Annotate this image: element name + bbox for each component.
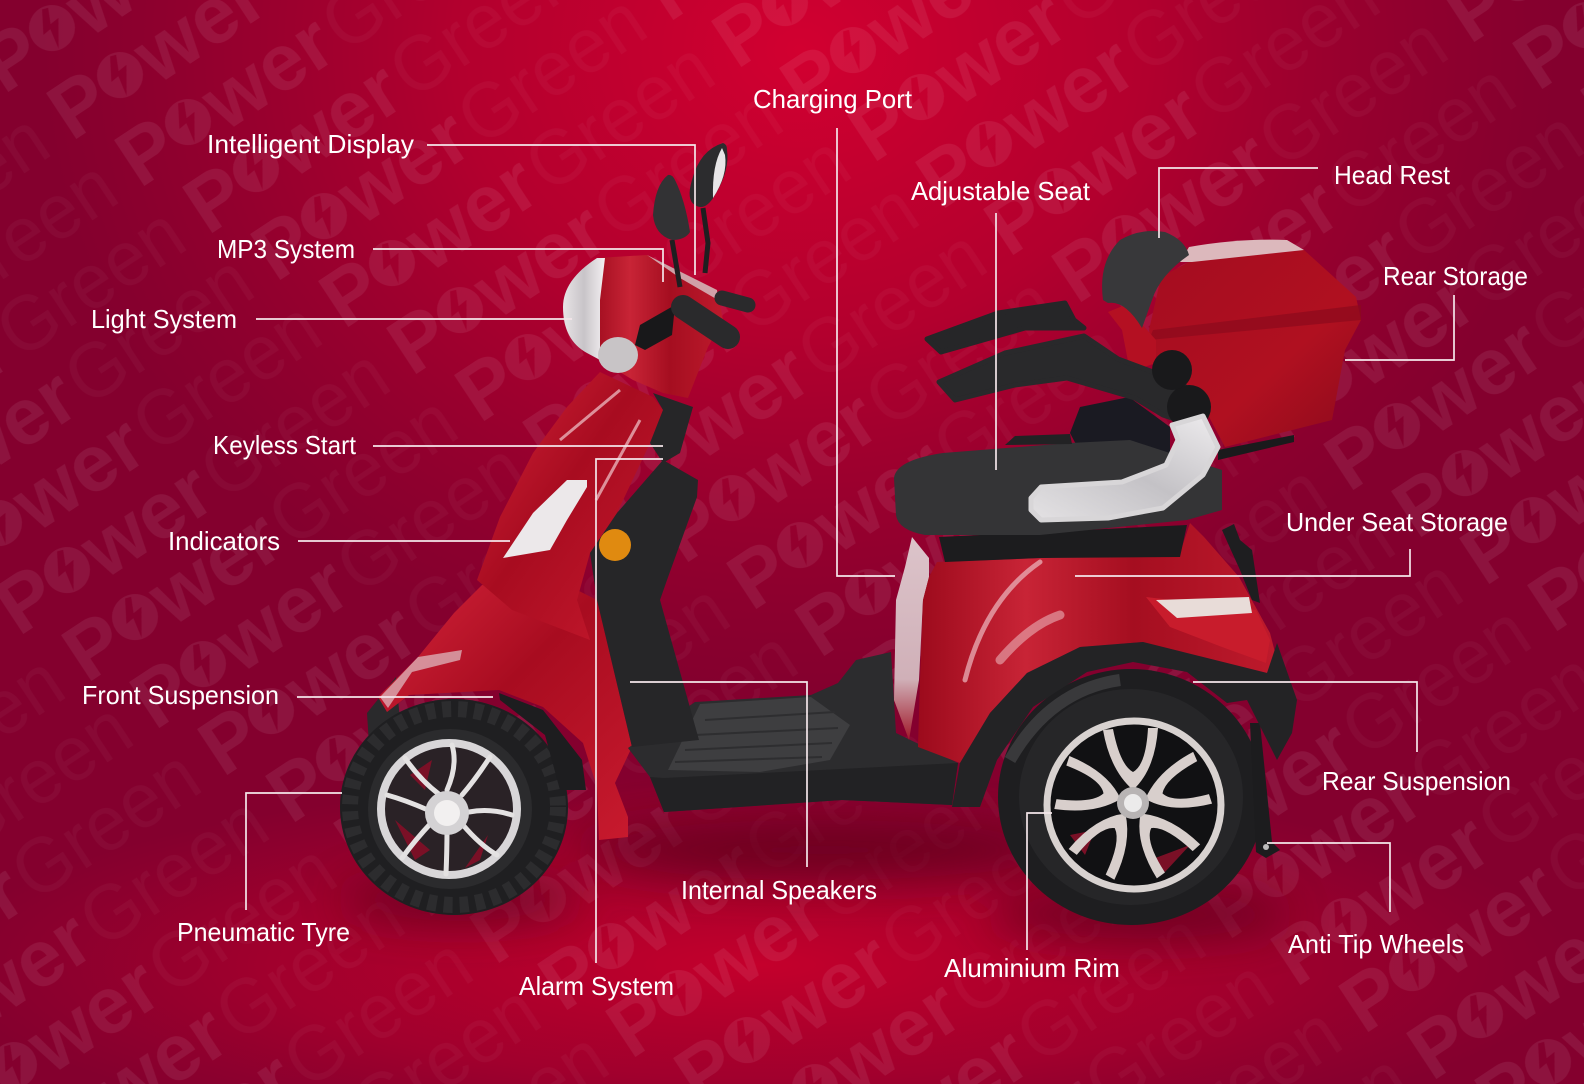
rear storage box — [1149, 240, 1361, 460]
callout: Pneumatic Tyre — [177, 793, 350, 947]
callout: Head Rest: Head Rest — [1334, 160, 1451, 190]
bag inside — [1070, 397, 1170, 477]
silver arm handle — [1031, 416, 1218, 520]
callout: MP3 System — [217, 234, 663, 282]
amber reflector — [599, 529, 631, 561]
callout: Aluminium Rim — [944, 813, 1120, 983]
front fender and fairing — [378, 585, 632, 840]
rear body — [918, 523, 1277, 763]
seat cushion — [894, 440, 1222, 535]
rear fender black — [952, 642, 1297, 807]
under seat dark — [939, 525, 1187, 562]
brake lever — [635, 305, 675, 350]
right mirror — [690, 143, 728, 207]
silver side panel — [894, 537, 929, 740]
callout: Anti Tip Wheels: Anti Tip Wheels — [1288, 929, 1464, 959]
rear body highlight — [965, 562, 1060, 680]
callout: Alarm System: Alarm System — [519, 971, 674, 1001]
ground shadow — [340, 820, 1290, 939]
callout: Under Seat Storage: Under Seat Storage — [1286, 507, 1508, 537]
front tyre — [340, 699, 568, 915]
indicator lens — [503, 480, 587, 558]
callout: Head Rest — [1159, 160, 1451, 238]
callout: Charging Port — [753, 84, 913, 576]
callout: Adjustable Seat: Adjustable Seat — [911, 176, 1091, 206]
callout: Keyless Start: Keyless Start — [213, 430, 357, 460]
chrome lamp — [598, 337, 638, 373]
head rest — [1102, 231, 1189, 328]
front shield — [477, 372, 663, 640]
shield highlights — [560, 390, 640, 500]
armrest upper — [927, 303, 1084, 352]
tail light — [1146, 597, 1270, 663]
left mirror — [653, 175, 690, 240]
callout: Intelligent Display: Intelligent Display — [207, 129, 414, 159]
callout: Intelligent Display — [207, 129, 695, 275]
mirror glass — [713, 148, 726, 198]
callout: Under Seat Storage — [1075, 507, 1508, 576]
callout: Internal Speakers — [630, 682, 877, 905]
callout: Indicators: Indicators — [168, 526, 280, 556]
callout: Charging Port: Charging Port — [753, 84, 913, 114]
front bumper black — [367, 677, 400, 760]
front wheel arch inner — [499, 693, 586, 790]
handle grips — [683, 298, 748, 337]
head shell — [590, 255, 723, 398]
callout: Front Suspension: Front Suspension — [82, 680, 279, 710]
display panel — [647, 255, 718, 300]
callout: Alarm System — [519, 459, 674, 1001]
scooter illustration — [340, 143, 1361, 925]
rear aluminium rim — [1044, 718, 1224, 892]
front aluminium rim — [378, 740, 520, 878]
callout: MP3 System: MP3 System — [217, 234, 355, 264]
callout: Rear Storage — [1345, 261, 1528, 360]
mirror stems — [672, 208, 708, 287]
callout: Internal Speakers: Internal Speakers — [681, 875, 877, 905]
callout: Rear Suspension — [1193, 682, 1511, 796]
back seat strip — [1005, 434, 1072, 445]
rear tyre — [998, 669, 1264, 925]
keys — [1222, 524, 1260, 603]
arm joints — [1152, 350, 1211, 429]
callout: Anti Tip Wheels — [1267, 843, 1464, 959]
callout: Light System: Light System — [91, 304, 237, 334]
callout: Aluminium Rim: Aluminium Rim — [944, 953, 1120, 983]
callout: Rear Suspension: Rear Suspension — [1322, 766, 1511, 796]
fender highlight — [380, 650, 462, 708]
callout: Rear Storage: Rear Storage — [1383, 261, 1528, 291]
headlight — [563, 258, 605, 360]
anti tip wheels — [1250, 723, 1280, 858]
black leg shield — [590, 393, 699, 747]
callout: Pneumatic Tyre: Pneumatic Tyre — [177, 917, 350, 947]
floor deck — [628, 652, 958, 812]
armrest lower — [939, 336, 1207, 424]
storage post — [1108, 305, 1156, 372]
